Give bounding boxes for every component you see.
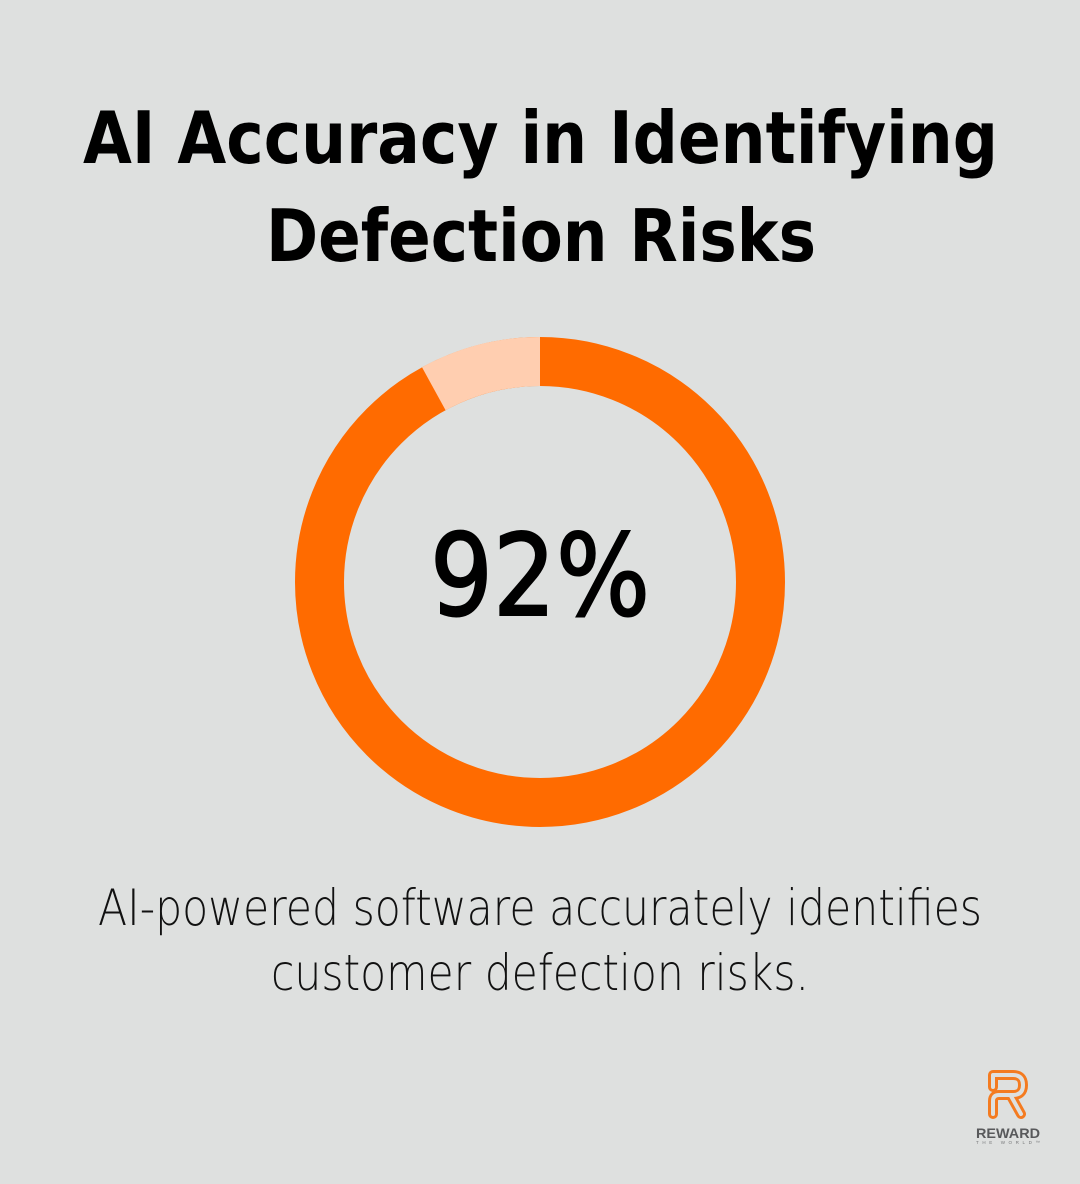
title: [83, 96, 998, 278]
remaining 8% segment: [422, 337, 540, 410]
title: Defection Risks: [266, 194, 816, 278]
wordmark: REWARD: [976, 1125, 1040, 1141]
icon: R mark: [993, 1075, 1023, 1114]
description: customer defection risks.: [271, 944, 809, 1002]
tagline: THE WORLD™: [976, 1140, 1040, 1145]
center value: 92%: [430, 510, 650, 642]
logo: Reward the World: [976, 1075, 1040, 1145]
description: [98, 879, 982, 1002]
donut chart: 92%: [320, 337, 760, 802]
